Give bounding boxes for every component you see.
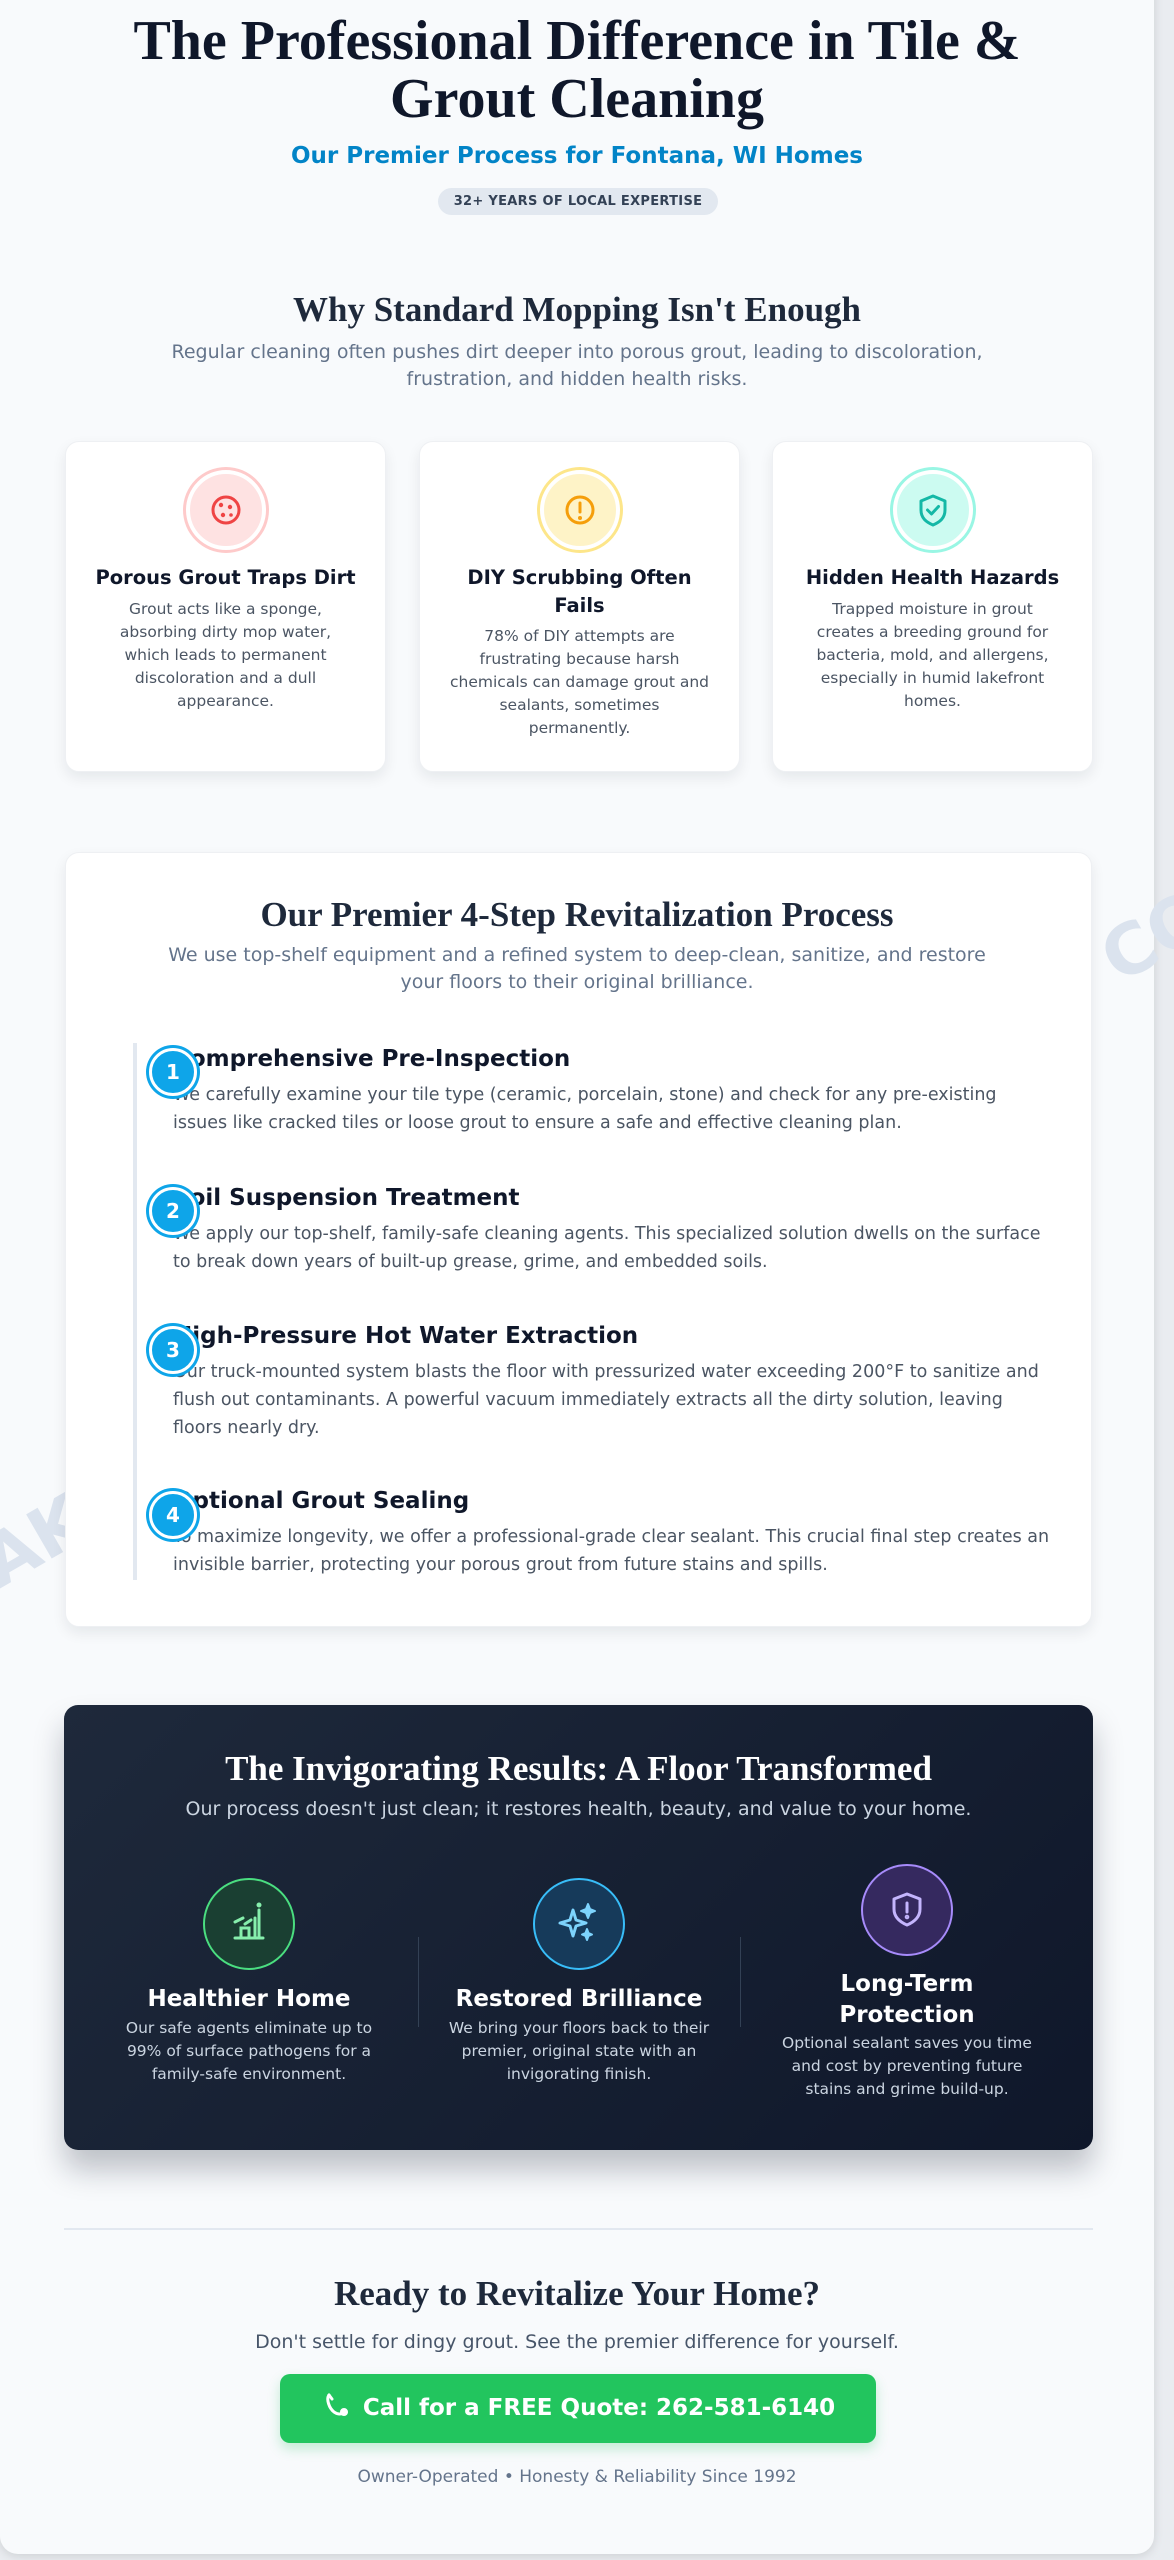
card: porous grout: Grout acts like a sponge, absorbing dirty mop water, which leads to permanent discoloration and a dull appearance. [120, 600, 331, 710]
result: healthier home: Our safe agents eliminate up to 99% of surface pathogens for a family-safe environment. [126, 2019, 372, 2083]
title: The Professional Difference in Tile & [133, 10, 1021, 72]
footer: Owner-Operated • Honesty & Reliability Since 1992 [357, 2467, 797, 2487]
timeline line [133, 1043, 137, 1580]
process heading: Our Premier 4-Step Revitalization Process [260, 895, 894, 934]
card: diy: permanently. [529, 719, 630, 737]
text: Soil Suspension Treatment [173, 1185, 520, 1211]
badge [438, 188, 718, 215]
text: High-Pressure Hot Water Extraction [173, 1323, 638, 1349]
cta text: Don't settle for dingy grout. See the premier difference for yourself. [255, 2331, 899, 2353]
step 3 [146, 1323, 1039, 1438]
text: Optional Grout Sealing [173, 1488, 469, 1514]
icon: sparkles [533, 1878, 625, 1970]
card: diy: frustrating because harsh [479, 650, 680, 668]
subtitle: Our Premier Process for Fontana, WI Homes [291, 143, 863, 169]
result: long-term protection: Optional sealant saves you time and cost by preventing future stains and grime build-up. [782, 2034, 1032, 2098]
step number 2 [149, 1187, 197, 1235]
card: health hazards [772, 441, 1093, 772]
card: diy: chemicals can damage grout and [450, 673, 709, 691]
card: porous grout: Porous Grout Traps Dirt [95, 566, 356, 589]
card: health hazards: Trapped moisture in grout creates a breeding ground for bacteria, mold, and allergens, especially in humid lakefront homes. [816, 600, 1049, 710]
cta button: Call for a FREE Quote: 262-581-6140 [363, 2395, 835, 2421]
title [133, 10, 1021, 130]
step number 4 [149, 1491, 197, 1539]
result: long-term protection: Long-Term [840, 1971, 974, 1997]
step 4 [146, 1488, 1049, 1575]
step number 3: 3 [166, 1338, 180, 1362]
result: long-term protection: Protection [839, 2002, 975, 2028]
card: diy: sealants, sometimes [499, 696, 660, 714]
card: diy [419, 441, 740, 772]
text: We carefully examine your tile type (ceramic, porcelain, stone) and check for any pre-existing issues like cracked tiles or loose grout to ensure a safe and effective cleaning plan. [173, 1085, 997, 1133]
text: Comprehensive Pre-Inspection [173, 1046, 570, 1072]
card: diy: DIY Scrubbing Often Fails [467, 566, 692, 617]
title: Grout Cleaning [390, 68, 764, 130]
result: restored brilliance: We bring your floors back to their premier, original state with an invigorating finish. [449, 2019, 709, 2083]
panel: process [65, 852, 1092, 1627]
intro text: Regular cleaning often pushes dirt deeper into porous grout, leading to discoloration, frustration, and hidden health risks. [171, 341, 983, 390]
card: porous grout [65, 441, 386, 772]
badge: 32+ YEARS OF LOCAL EXPERTISE [454, 194, 702, 209]
icon: dirt [186, 470, 266, 550]
cta heading: Ready to Revitalize Your Home? [334, 2274, 820, 2313]
result: long-term protection [782, 1864, 1032, 2098]
step number 2: 2 [166, 1199, 180, 1223]
step number 4: 4 [166, 1503, 180, 1527]
icon: phone [326, 2393, 348, 2416]
step number 1 [149, 1048, 197, 1096]
card: health hazards: Hidden Health Hazards [806, 566, 1059, 589]
result: restored brilliance: Restored Brilliance [456, 1986, 702, 2012]
text: To maximize longevity, we offer a professional-grade clear sealant. This crucial final step creates an invisible barrier, protecting your porous grout from future stains and spills. [173, 1527, 1049, 1575]
text: We apply our top-shelf, family-safe cleaning agents. This specialized solution dwells on the surface to break down years of built-up grease, grime, and embedded soils. [173, 1224, 1040, 1272]
step number 1: 1 [166, 1060, 180, 1084]
step number 3 [149, 1326, 197, 1374]
icon: warning [540, 470, 620, 550]
process intro: We use top-shelf equipment and a refined system to deep-clean, sanitize, and restore your floors to their original brilliance. [168, 944, 986, 993]
cta button [280, 2374, 876, 2443]
results intro: Our process doesn't just clean; it restores health, beauty, and value to your home. [186, 1798, 971, 1820]
icon: shield check [893, 470, 973, 550]
text: Our truck-mounted system blasts the floor with pressurized water exceeding 200°F to sanitize and flush out contaminants. A powerful vacuum immediately extracts all the dirty solution, leaving floors nearly dry. [173, 1362, 1039, 1438]
icon: chart [203, 1878, 295, 1970]
result: healthier home [126, 1878, 372, 2083]
heading: why mopping: Why Standard Mopping Isn't Enough [293, 290, 861, 329]
panel: results [64, 1705, 1093, 2150]
step 2 [146, 1184, 1040, 1272]
result: healthier home: Healthier Home [147, 1986, 351, 2012]
result: restored brilliance [449, 1878, 710, 2083]
card: diy: 78% of DIY attempts are [484, 627, 675, 645]
icon: shield [861, 1864, 953, 1956]
step 1 [146, 1045, 997, 1133]
results heading: The Invigorating Results: A Floor Transformed [225, 1749, 932, 1788]
